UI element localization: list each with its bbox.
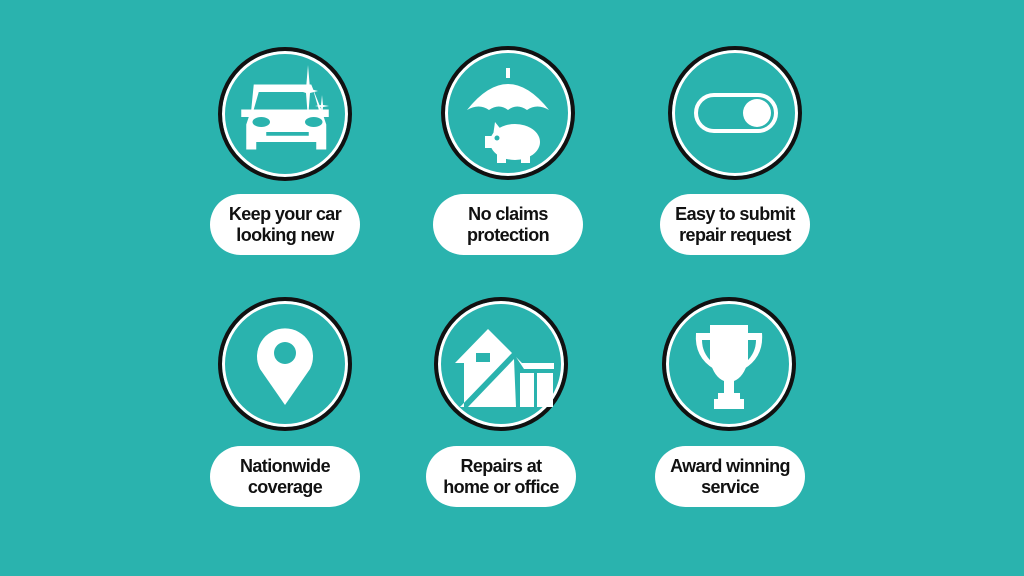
- label: nationwide: coverage: [248, 476, 322, 496]
- label: repairs at home: [426, 446, 576, 507]
- label: easy to submit: repair request: [679, 224, 791, 244]
- label: award winning: Award winning: [670, 456, 790, 476]
- label: award winning: [655, 446, 805, 507]
- label: no claims: protection: [467, 224, 549, 244]
- icon circle: location pin: [218, 297, 352, 431]
- label: award winning: service: [701, 476, 759, 496]
- icon circle: car: [218, 47, 352, 181]
- icon circle: trophy: [662, 297, 796, 431]
- label: keep your car: [210, 194, 360, 255]
- label: repairs at home: Repairs at: [460, 456, 542, 476]
- label: no claims: No claims: [468, 204, 548, 224]
- label: easy to submit: [660, 194, 810, 255]
- label: repairs at home: home or office: [443, 476, 559, 496]
- label: nationwide: Nationwide: [240, 456, 330, 476]
- label: keep your car: looking new: [236, 224, 334, 244]
- icon circle: umbrella piggy: [441, 46, 575, 180]
- label: no claims: [433, 194, 583, 255]
- label: nationwide: [210, 446, 360, 507]
- label: easy to submit: Easy to submit: [675, 204, 795, 224]
- icon circle: toggle: [668, 46, 802, 180]
- icon circle: house: [434, 297, 568, 431]
- label: keep your car: Keep your car: [229, 204, 341, 224]
